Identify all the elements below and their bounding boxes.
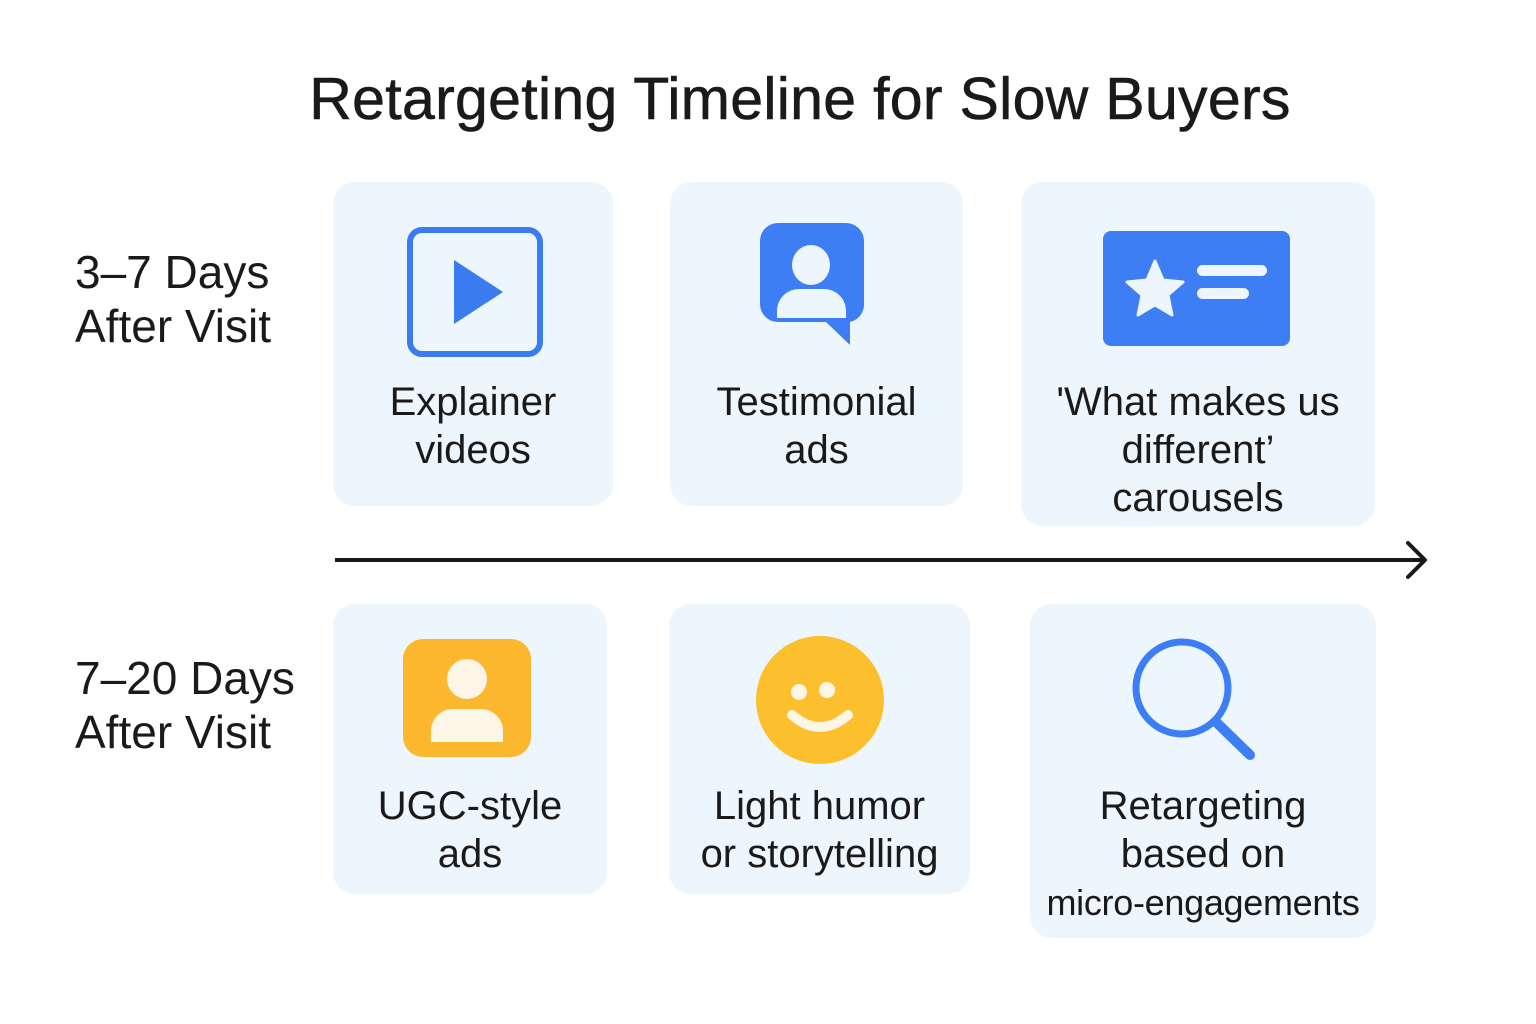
icon: smiley <box>756 636 884 764</box>
text: based on <box>1121 832 1285 876</box>
arrow: timeline <box>335 540 1428 580</box>
icon: play <box>407 227 543 357</box>
panel: what makes us different <box>1021 182 1375 526</box>
title: Retargeting Timeline for Slow Buyers <box>309 66 1291 132</box>
panel: light humor <box>669 604 970 894</box>
icon: testimonial bubble <box>760 223 864 345</box>
label: 7-20 days: 7–20 Days <box>75 652 295 704</box>
text: Testimonial <box>716 380 917 424</box>
text: 'What makes us <box>1056 380 1340 424</box>
text <box>1046 784 1360 923</box>
panel: UGC-style ads <box>333 604 607 894</box>
label: 3-7 days <box>75 246 271 352</box>
panel: testimonial ads <box>670 182 963 506</box>
label: 3-7 days: 3–7 Days <box>75 246 269 298</box>
icon: magnifier <box>1132 638 1255 760</box>
text: ads <box>438 832 502 876</box>
text: ads <box>784 428 849 472</box>
panel: explainer videos <box>333 182 613 506</box>
text <box>1056 380 1340 520</box>
text <box>378 784 562 876</box>
text: carousels <box>1112 476 1284 520</box>
text <box>701 784 938 876</box>
label: 7-20 days: After Visit <box>75 706 271 758</box>
text: micro-engagements <box>1046 882 1360 923</box>
text: Light humor <box>714 784 925 828</box>
label: 7-20 days <box>75 652 295 758</box>
text: UGC-style <box>378 784 562 828</box>
text: videos <box>415 428 531 472</box>
text: Explainer <box>390 380 556 424</box>
text: different’ <box>1122 428 1274 472</box>
icon: carousel card <box>1103 231 1290 346</box>
text <box>716 380 917 472</box>
panel: micro-engagements <box>1030 604 1376 938</box>
text: Retargeting <box>1100 784 1306 828</box>
icon: UGC person <box>403 639 531 757</box>
label: 3-7 days: After Visit <box>75 300 271 352</box>
text: or storytelling <box>701 832 938 876</box>
text <box>390 380 556 472</box>
